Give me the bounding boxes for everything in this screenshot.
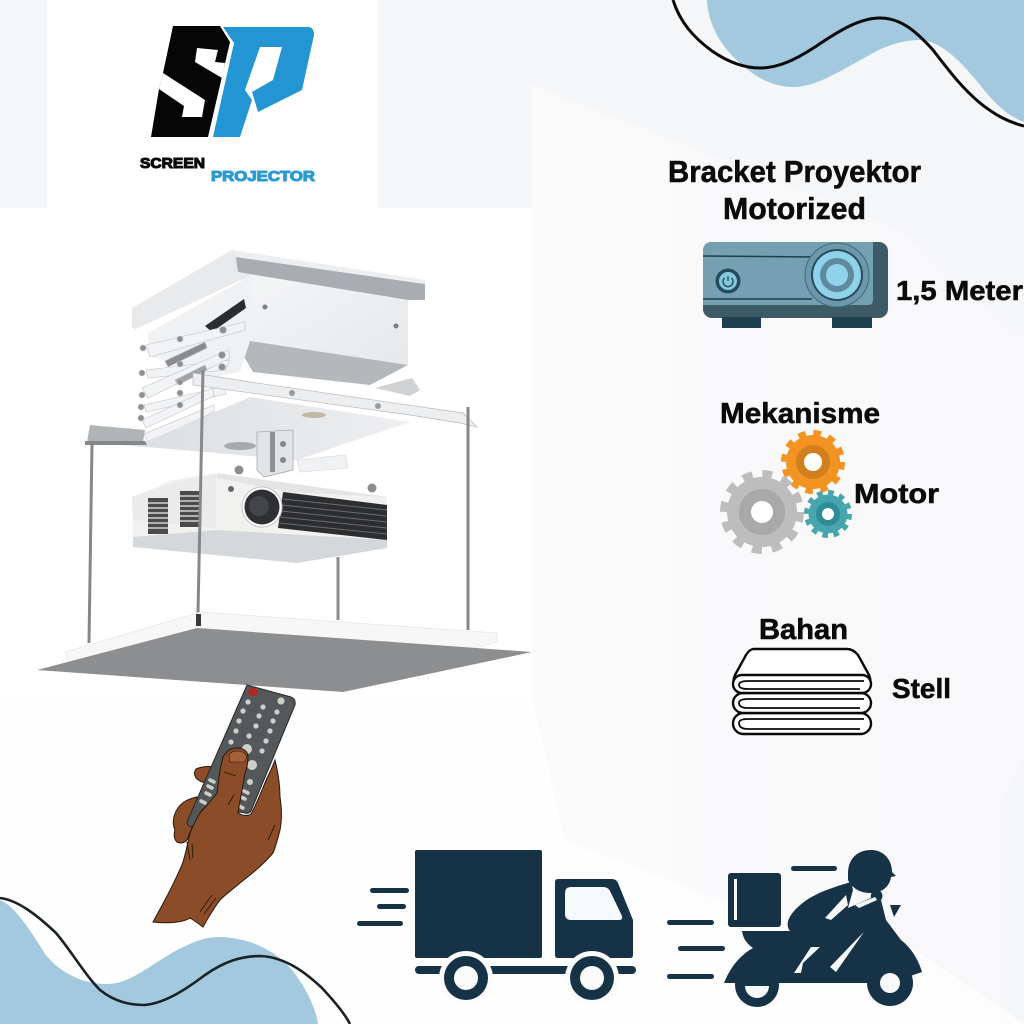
spec label: Motor: Motor	[854, 478, 939, 509]
spec label: Stell: Stell	[892, 673, 951, 704]
bottom-left black curve	[0, 898, 350, 1024]
teal gear	[806, 492, 850, 536]
spec label: Mekanisme: Mekanisme	[720, 398, 880, 430]
lower mounting frame	[85, 373, 477, 460]
suspension rods	[89, 370, 468, 643]
top-right black curve	[673, 0, 1024, 126]
scissor lift arms	[138, 322, 245, 442]
motor housing box	[148, 275, 408, 385]
ceiling projector	[132, 466, 387, 563]
grey gear	[724, 474, 800, 550]
spec: gears icon	[724, 433, 850, 550]
logo: P mark	[213, 27, 314, 137]
delivery scooter icon	[667, 850, 922, 1007]
logo: SCREEN wordmark: SCREEN	[140, 155, 205, 172]
heading: Motorized	[723, 191, 866, 226]
spec: projector icon	[703, 242, 888, 328]
heading: Bracket Proyektor	[668, 154, 921, 189]
spec: stacked material icon	[733, 649, 871, 734]
bottom ceiling panel	[37, 612, 532, 692]
thumbnail	[229, 751, 247, 762]
heading	[668, 154, 921, 226]
spec label: Bahan: Bahan	[759, 614, 848, 646]
motorized bracket illustration	[37, 250, 532, 692]
skin creases	[187, 772, 275, 914]
back fingers	[173, 767, 220, 843]
palm and thumb	[153, 748, 282, 927]
logo: PROJECTOR wordmark: PROJECTOR	[211, 168, 315, 185]
spec label: 1,5 Meter: 1,5 Meter	[896, 275, 1023, 306]
product photo panel	[0, 208, 532, 698]
top-right blue blob	[707, 0, 1024, 122]
logo: S mark	[151, 26, 230, 137]
back support rod	[336, 557, 340, 620]
ceiling plate	[132, 250, 425, 330]
remote control	[187, 685, 295, 826]
orange gear	[784, 433, 842, 491]
logo panel	[47, 0, 378, 208]
ceiling-mount joint	[257, 430, 348, 477]
delivery truck icon	[357, 850, 636, 1005]
bottom-left blue blob	[0, 900, 318, 1024]
hand holding remote	[153, 685, 295, 927]
